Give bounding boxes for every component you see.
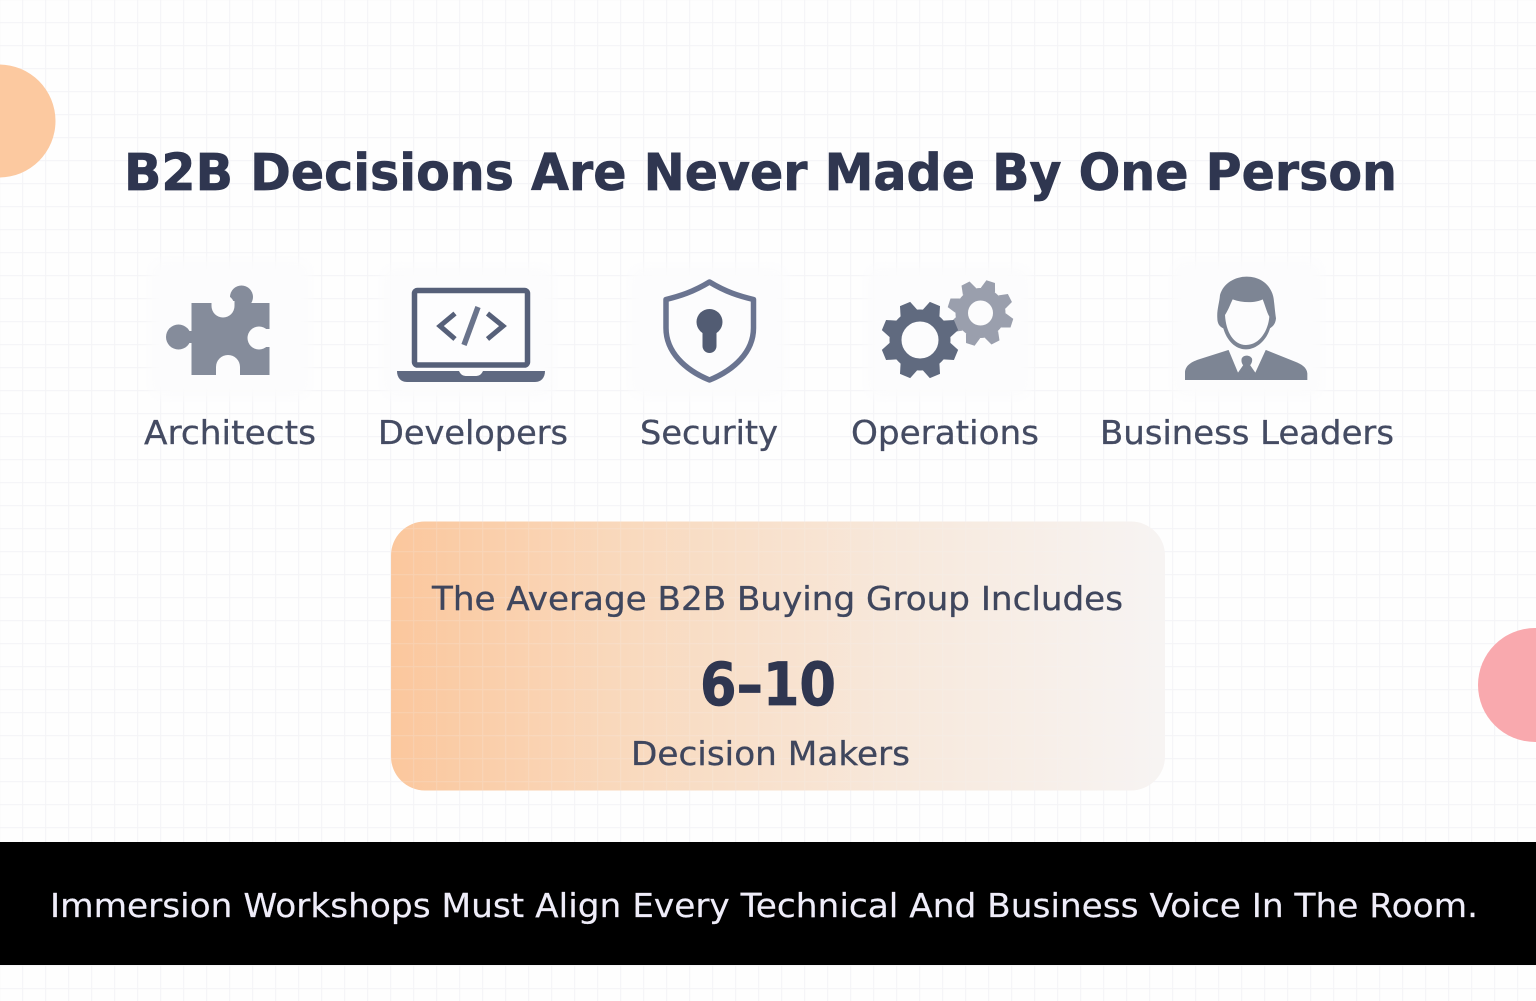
icon: business person: [1185, 277, 1307, 380]
text: decision makers: Decision Makers: [631, 734, 910, 773]
footer banner: [0, 842, 1536, 965]
text: stat intro: The Average B2B Buying Group Includes: [431, 579, 1123, 618]
icon: puzzle piece: [166, 286, 271, 379]
role: developers: [378, 266, 568, 452]
label: business leaders: Business Leaders: [1100, 413, 1394, 452]
icon: gears: [881, 279, 1014, 379]
icon: shield with keyhole: [666, 282, 754, 380]
role: architects: [144, 260, 316, 452]
decorative circle: pink right: [1478, 628, 1536, 742]
label: security: Security: [640, 413, 778, 452]
icon: large gear: [881, 301, 959, 379]
label: developers: Developers: [378, 413, 568, 452]
role: operations: [851, 266, 1039, 452]
panel: buying group stat: [391, 522, 1165, 790]
label: operations: Operations: [851, 413, 1039, 452]
role: security: [630, 266, 786, 452]
icon: laptop with code: [397, 290, 545, 382]
icon: small gear: [947, 279, 1014, 347]
text: footer message: Immersion Workshops Must Align Every Technical And Business Voice In The Room.: [50, 886, 1478, 925]
decorative circle: orange left: [0, 64, 56, 178]
number: 6–10: 6–10: [700, 650, 836, 720]
title: B2B Decisions Are Never Made By One Person: [124, 144, 1397, 203]
role: business leaders: [1100, 260, 1394, 452]
label: architects: Architects: [144, 413, 316, 452]
